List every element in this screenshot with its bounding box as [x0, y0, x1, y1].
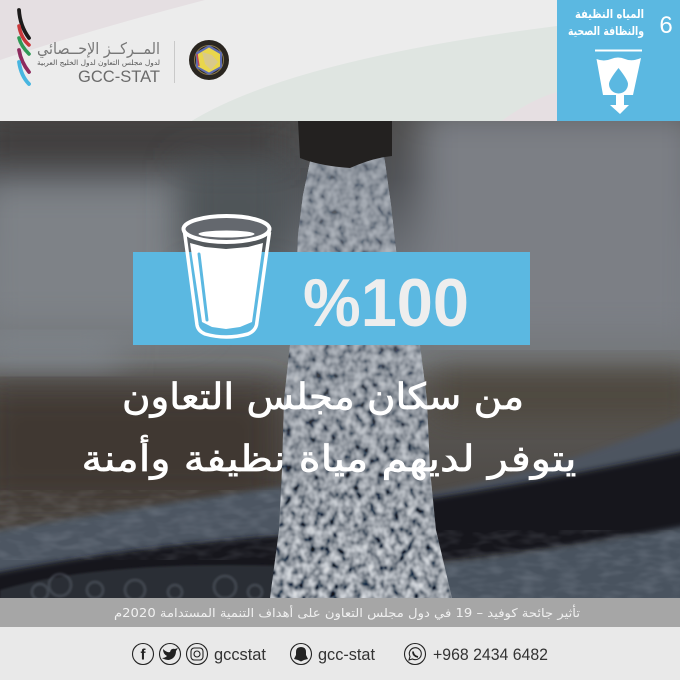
source text: تأثير جائحة كوفيد – 19 في دول مجلس التعاون على أهداف التنمية المستدامة 2020م: [114, 604, 580, 621]
SDG goal number: 6: [659, 12, 673, 39]
phone number: +968 2434 6482: [433, 645, 548, 664]
icon: instagram: [186, 644, 208, 664]
SDG goal title: والنظافة الصحية: [568, 24, 644, 39]
handle: gcc-stat: gcc-stat: [318, 645, 375, 664]
icon: twitter: [160, 644, 180, 664]
divider: [174, 41, 175, 83]
logo Arabic name: المــركــز الإحــصائي: [37, 39, 160, 59]
foam at the bottom: [0, 565, 290, 600]
logo GCC-STAT wordmark: GCC-STAT: [78, 67, 160, 86]
background photo: water pouring from tap: [0, 110, 680, 610]
logo: GCC-STAT: [19, 10, 160, 86]
water stream: [265, 150, 460, 600]
blue percent bar: [133, 252, 530, 345]
blurred backdrop tones: [0, 110, 680, 505]
message line 2: يتوفر لديهم مياة نظيفة وأمنة: [82, 435, 576, 480]
SDG 6 panel: [557, 0, 680, 122]
statistic: 100%: %100: [303, 265, 469, 341]
SDG icon: water cup with arrow: [595, 50, 642, 114]
tap: [298, 121, 392, 168]
icon: whatsapp: [404, 644, 426, 664]
icon: snapchat: [290, 644, 312, 664]
left log: [0, 486, 285, 600]
SDG goal title: [568, 7, 644, 39]
SDG goal title: المياه النظيفة: [575, 7, 644, 21]
icon: facebook: f: [140, 646, 146, 664]
emblem: GCC: [189, 40, 229, 80]
handle: gccstat: gccstat: [214, 645, 266, 664]
message line 1: من سكان مجلس التعاون: [122, 377, 524, 418]
right log: [432, 418, 680, 598]
logo ribbon: [19, 10, 29, 84]
source strip: [0, 598, 680, 627]
main message: [82, 377, 576, 480]
icon: glass of water: [184, 216, 270, 337]
footer bar: [0, 627, 680, 680]
logo Arabic subtitle: لدول مجلس التعاون لدول الخليج العربية: [37, 59, 160, 67]
social: facebook, twitter, instagram: [132, 644, 208, 664]
header background: [0, 0, 680, 122]
